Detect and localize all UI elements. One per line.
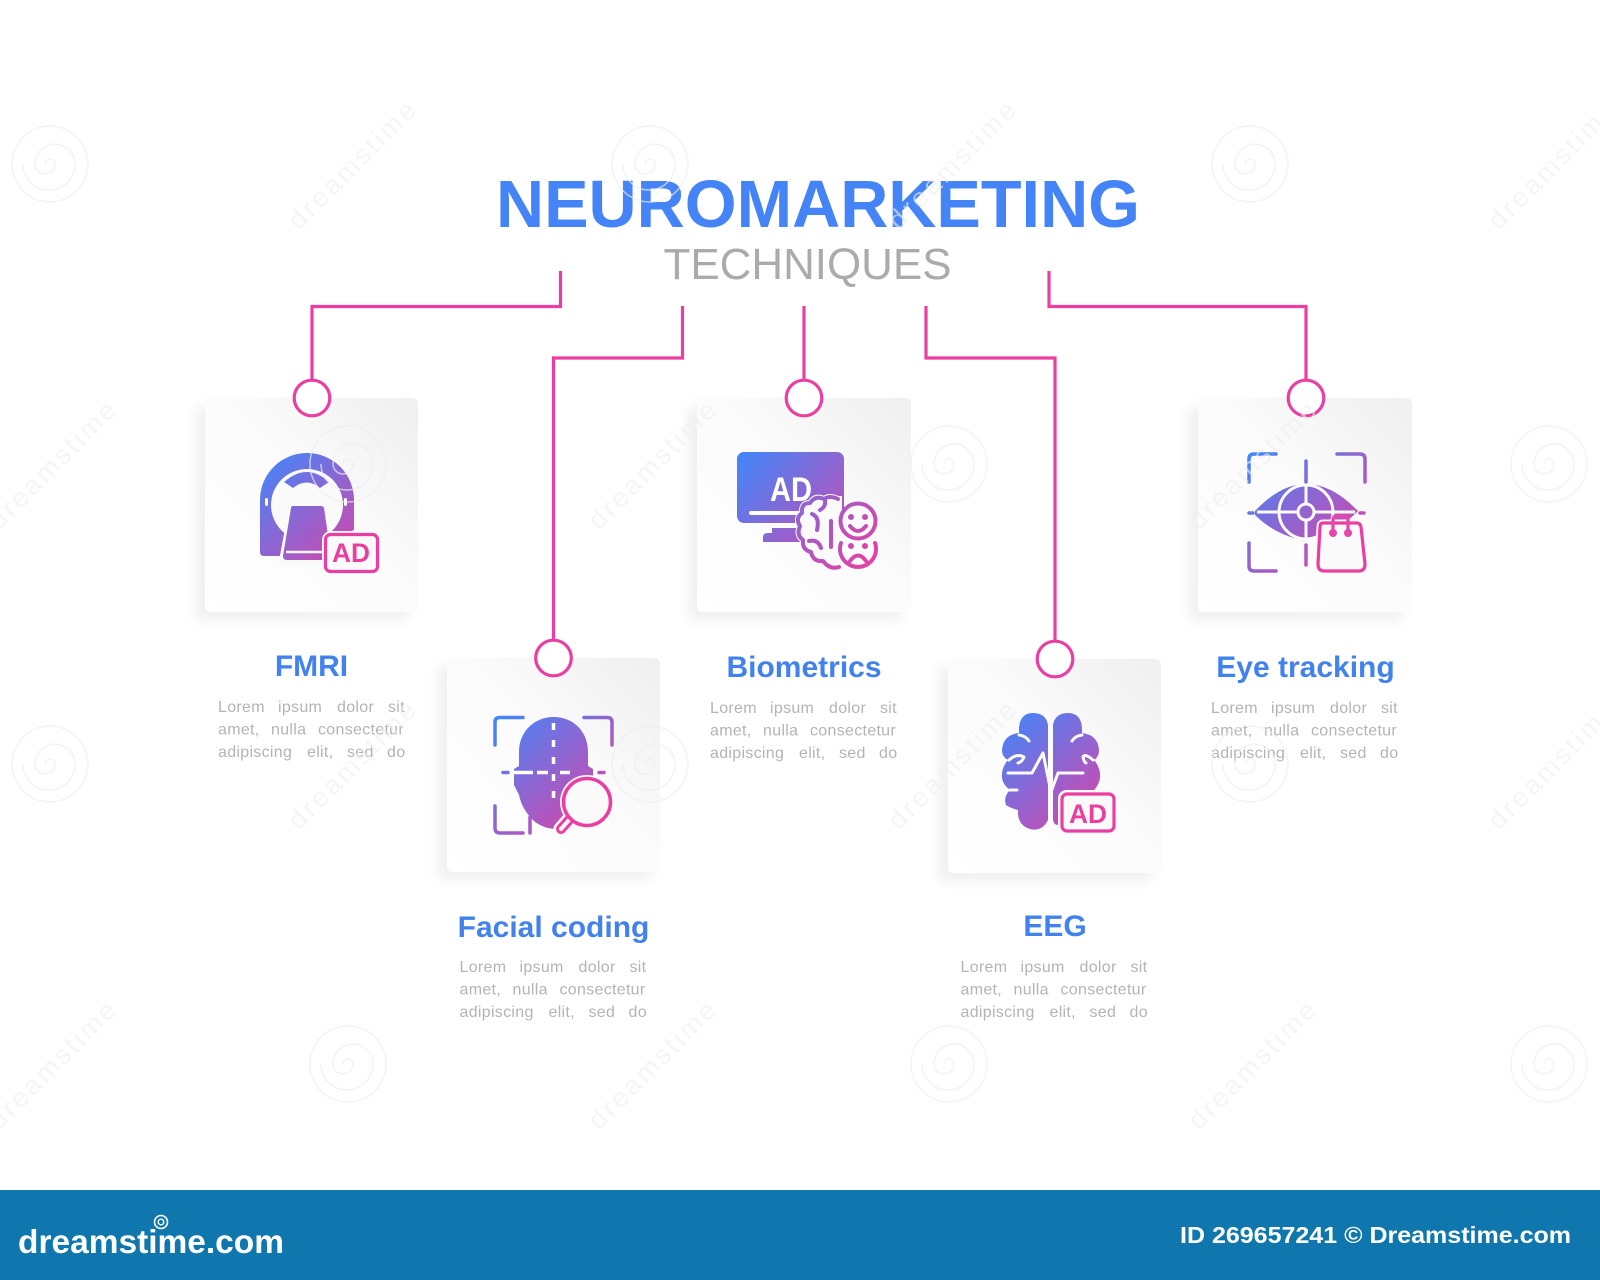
text block: FMRI: sit (388, 699, 405, 716)
label: Biometrics: Biometrics (726, 651, 882, 684)
footer image id: ID 269657241 © Dreamstime.com (1180, 1222, 1571, 1248)
panel: FMRI (205, 380, 418, 761)
icon: brain with pulse and ad (1002, 713, 1114, 832)
text block: Eye tracking: ipsum (1271, 700, 1315, 717)
icon: face scan with magnifier (495, 717, 614, 833)
watermark overlay: dreamstime (582, 995, 722, 1135)
text block: EEG (960, 959, 1148, 1021)
watermark overlay: dreamstime (582, 395, 722, 535)
icon: eye target with shopping bag (1249, 454, 1365, 571)
footer band (0, 1190, 1600, 1280)
text block: Eye tracking: adipiscing (1211, 745, 1285, 762)
text block: FMRI (218, 699, 405, 761)
label: Eye tracking: Eye tracking (1216, 651, 1395, 684)
text block: Facial coding: do (628, 1004, 647, 1021)
text block: Facial coding: elit, (548, 1004, 575, 1021)
text block: Eye tracking: Lorem (1211, 700, 1258, 717)
text block: Eye tracking: sed (1340, 745, 1367, 762)
watermark overlay: dreamstime (282, 695, 422, 835)
text block: FMRI: elit, (307, 744, 333, 761)
text block: Facial coding (460, 959, 647, 1021)
text block: EEG: amet, (960, 982, 1002, 998)
text block: FMRI: amet, (218, 722, 260, 738)
text block: Facial coding: adipiscing (460, 1004, 534, 1021)
node: Biometrics (786, 380, 822, 416)
panel: Eye tracking (1198, 380, 1412, 762)
text block: EEG: Lorem (960, 959, 1007, 976)
text block: EEG: nulla (1014, 982, 1049, 998)
node: Eye tracking (1288, 380, 1324, 416)
icon: monitor with brain and faces (737, 452, 876, 568)
text block: Biometrics: amet, (710, 722, 752, 740)
watermark overlay: dreamstime (882, 695, 1022, 835)
text block: Eye tracking: elit, (1300, 745, 1326, 762)
text block: Facial coding: Lorem (460, 959, 506, 976)
text block: Facial coding: dolor (578, 959, 616, 976)
text block: Eye tracking: do (1380, 745, 1398, 762)
text block: Eye tracking: dolor (1330, 700, 1367, 717)
text block: FMRI: consectetur (318, 722, 404, 738)
text block: FMRI: sed (347, 744, 374, 761)
icon: brain with pulse and ad: AD (1069, 799, 1107, 829)
text block: Facial coding: nulla (512, 982, 548, 998)
text block: EEG: do (1130, 1004, 1148, 1021)
watermark overlay: dreamstime (1182, 995, 1322, 1135)
card: FMRI (205, 398, 418, 612)
text block: Biometrics: sed (839, 745, 866, 762)
node: Facial coding (536, 640, 571, 676)
watermark overlay: dreamstime (282, 95, 422, 235)
text block: FMRI: dolor (337, 699, 374, 716)
text block: Biometrics: elit, (799, 745, 825, 762)
card: EEG (948, 659, 1161, 873)
card: Eye tracking (1198, 398, 1412, 612)
label: Facial coding: Facial coding (458, 911, 649, 944)
icon: monitor with brain and faces: AD (770, 471, 812, 509)
label: FMRI: FMRI (275, 650, 348, 683)
text block: EEG: sit (1130, 959, 1148, 976)
text block: Eye tracking: consectetur (1311, 722, 1397, 740)
text block: EEG: sed (1090, 1004, 1116, 1021)
text block: Facial coding: amet, (460, 982, 501, 998)
text block: Biometrics: sit (880, 700, 897, 717)
text block: Biometrics: consectetur (810, 722, 896, 740)
text block: Eye tracking: amet, (1211, 722, 1253, 740)
watermark overlay: dreamstime (882, 95, 1022, 235)
text block: Biometrics: dolor (829, 700, 866, 717)
label: EEG: EEG (1023, 910, 1087, 943)
text block: FMRI: do (387, 744, 405, 761)
node: FMRI (294, 380, 330, 416)
text block: Biometrics: nulla (763, 722, 798, 740)
text block: Biometrics: adipiscing (710, 745, 784, 762)
icon: MRI scanner with ad (260, 453, 378, 572)
text block: Facial coding: sit (630, 959, 647, 976)
panel: Facial coding (447, 640, 660, 1021)
watermark overlay: dreamstime (1182, 395, 1322, 535)
panel: EEG (948, 641, 1161, 1021)
text block: Facial coding: consectetur (560, 982, 646, 998)
text block: EEG: dolor (1080, 959, 1117, 976)
text block: Eye tracking (1211, 700, 1398, 762)
text block: FMRI: ipsum (278, 699, 322, 716)
text block: FMRI: Lorem (218, 699, 265, 716)
panel: Biometrics (697, 380, 911, 762)
icon: MRI scanner with ad: AD (332, 538, 370, 568)
text block: EEG: ipsum (1020, 959, 1065, 976)
text block: FMRI: nulla (271, 722, 306, 738)
subtitle: TECHNIQUES (664, 241, 952, 289)
card: Facial coding (447, 658, 660, 872)
text block: Biometrics: ipsum (770, 700, 814, 717)
text block: EEG: adipiscing (960, 1004, 1035, 1021)
title: NEUROMARKETING (496, 168, 1140, 242)
text block: EEG: elit, (1050, 1004, 1076, 1021)
text block: Facial coding: sed (588, 1004, 615, 1021)
text block: Biometrics (710, 700, 897, 762)
text block: EEG: consectetur (1060, 982, 1147, 998)
footer logo: dreamstime.com (18, 1223, 284, 1260)
text block: Eye tracking: sit (1381, 700, 1398, 717)
text block: FMRI: adipiscing (218, 744, 292, 761)
card: Biometrics (697, 398, 911, 612)
connector lines (312, 271, 1306, 641)
text block: Facial coding: ipsum (520, 959, 564, 976)
text block: Biometrics: do (879, 745, 897, 762)
node: EEG (1037, 641, 1073, 677)
text block: Eye tracking: nulla (1264, 722, 1299, 740)
text block: Biometrics: Lorem (710, 700, 757, 717)
